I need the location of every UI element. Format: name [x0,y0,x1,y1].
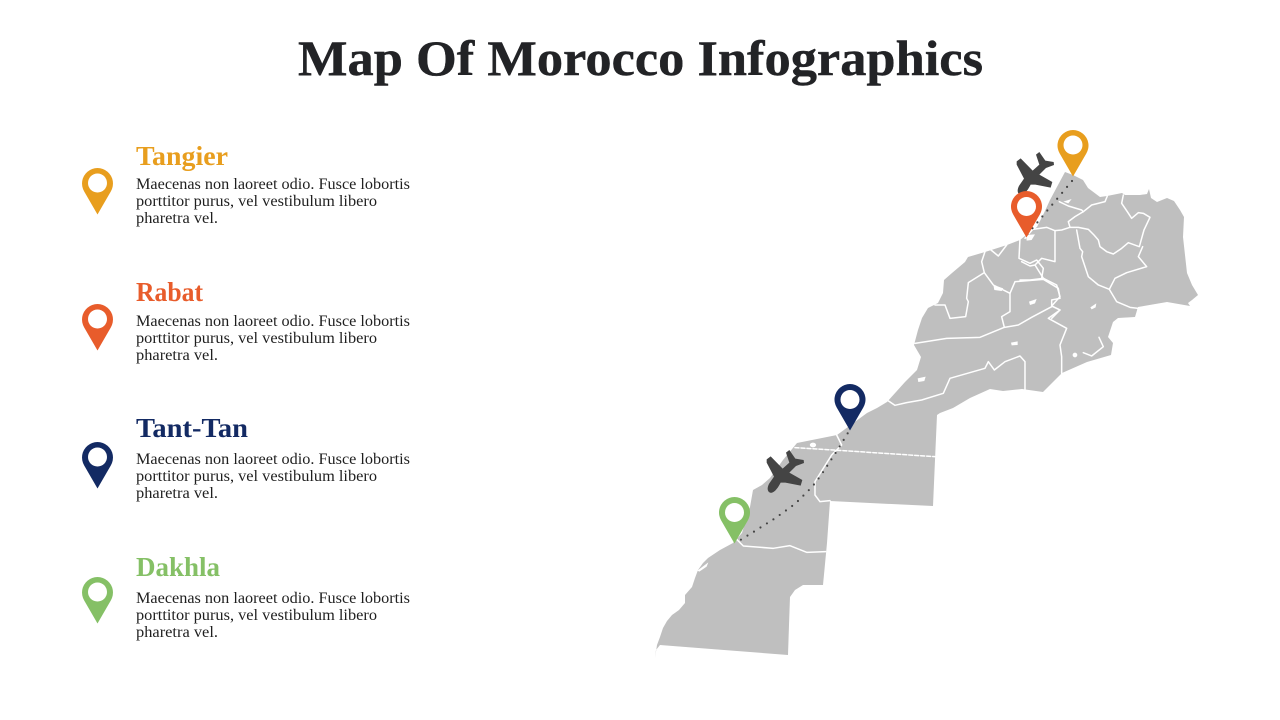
flight route: Tangier to Rabat [1026,181,1072,236]
map pin: Dakhla [719,497,750,544]
icon: airplane north [1017,152,1054,195]
icon: Rabat pin [82,304,113,350]
region borders: north east [1020,195,1150,318]
icon: airplane south [767,450,804,493]
heading: Tant-Tan: Tant-Tan [136,413,248,443]
map landmass [655,172,1198,658]
text block: Tangier: Maecenas non laoreet odio. Fusce lobortis [136,176,410,193]
region borders: south [697,435,935,572]
heading: Rabat: Rabat [136,277,203,307]
text block: Tangier: porttitor purus, vel vestibulum libero [136,193,377,210]
map pin: Tangier [1058,130,1088,176]
icon: Dakhla pin [82,577,113,624]
title: Map Of Morocco Infographics [298,30,983,86]
list item: Tant-Tan [82,413,410,502]
heading: Dakhla: Dakhla [136,552,220,582]
flight route: Tant-Tan to Dakhla [735,433,848,543]
map pin: Rabat [1011,191,1042,238]
text block: Tant-Tan: Maecenas non laoreet odio. Fusce lobortis [136,451,410,468]
list item: Rabat [82,277,410,364]
text block: Rabat: porttitor purus, vel vestibulum libero [136,330,377,347]
text block: Rabat: pharetra vel. [136,347,218,364]
text block: Tant-Tan: porttitor purus, vel vestibulum libero [136,468,377,485]
region borders: central [887,238,1103,405]
text block: Dakhla [136,590,410,641]
list item: Dakhla [82,552,410,641]
panel: city list [82,141,410,641]
text block: Dakhla: porttitor purus, vel vestibulum libero [136,607,377,624]
icon: Tangier pin [82,168,113,214]
text block: Rabat [136,313,410,364]
list item: Tangier [82,141,410,227]
text block: Dakhla: pharetra vel. [136,624,218,641]
heading: Tangier: Tangier [136,141,228,171]
icon: Tant-Tan pin [82,442,113,488]
text block: Dakhla: Maecenas non laoreet odio. Fusce lobortis [136,590,410,607]
text block: Tant-Tan [136,451,410,502]
map pin: Tant-Tan [834,384,866,430]
map of Morocco [655,172,1198,658]
text block: Tangier [136,176,410,227]
text block: Tant-Tan: pharetra vel. [136,485,218,502]
text block: Tangier: pharetra vel. [136,210,218,227]
text block: Rabat: Maecenas non laoreet odio. Fusce lobortis [136,313,410,330]
